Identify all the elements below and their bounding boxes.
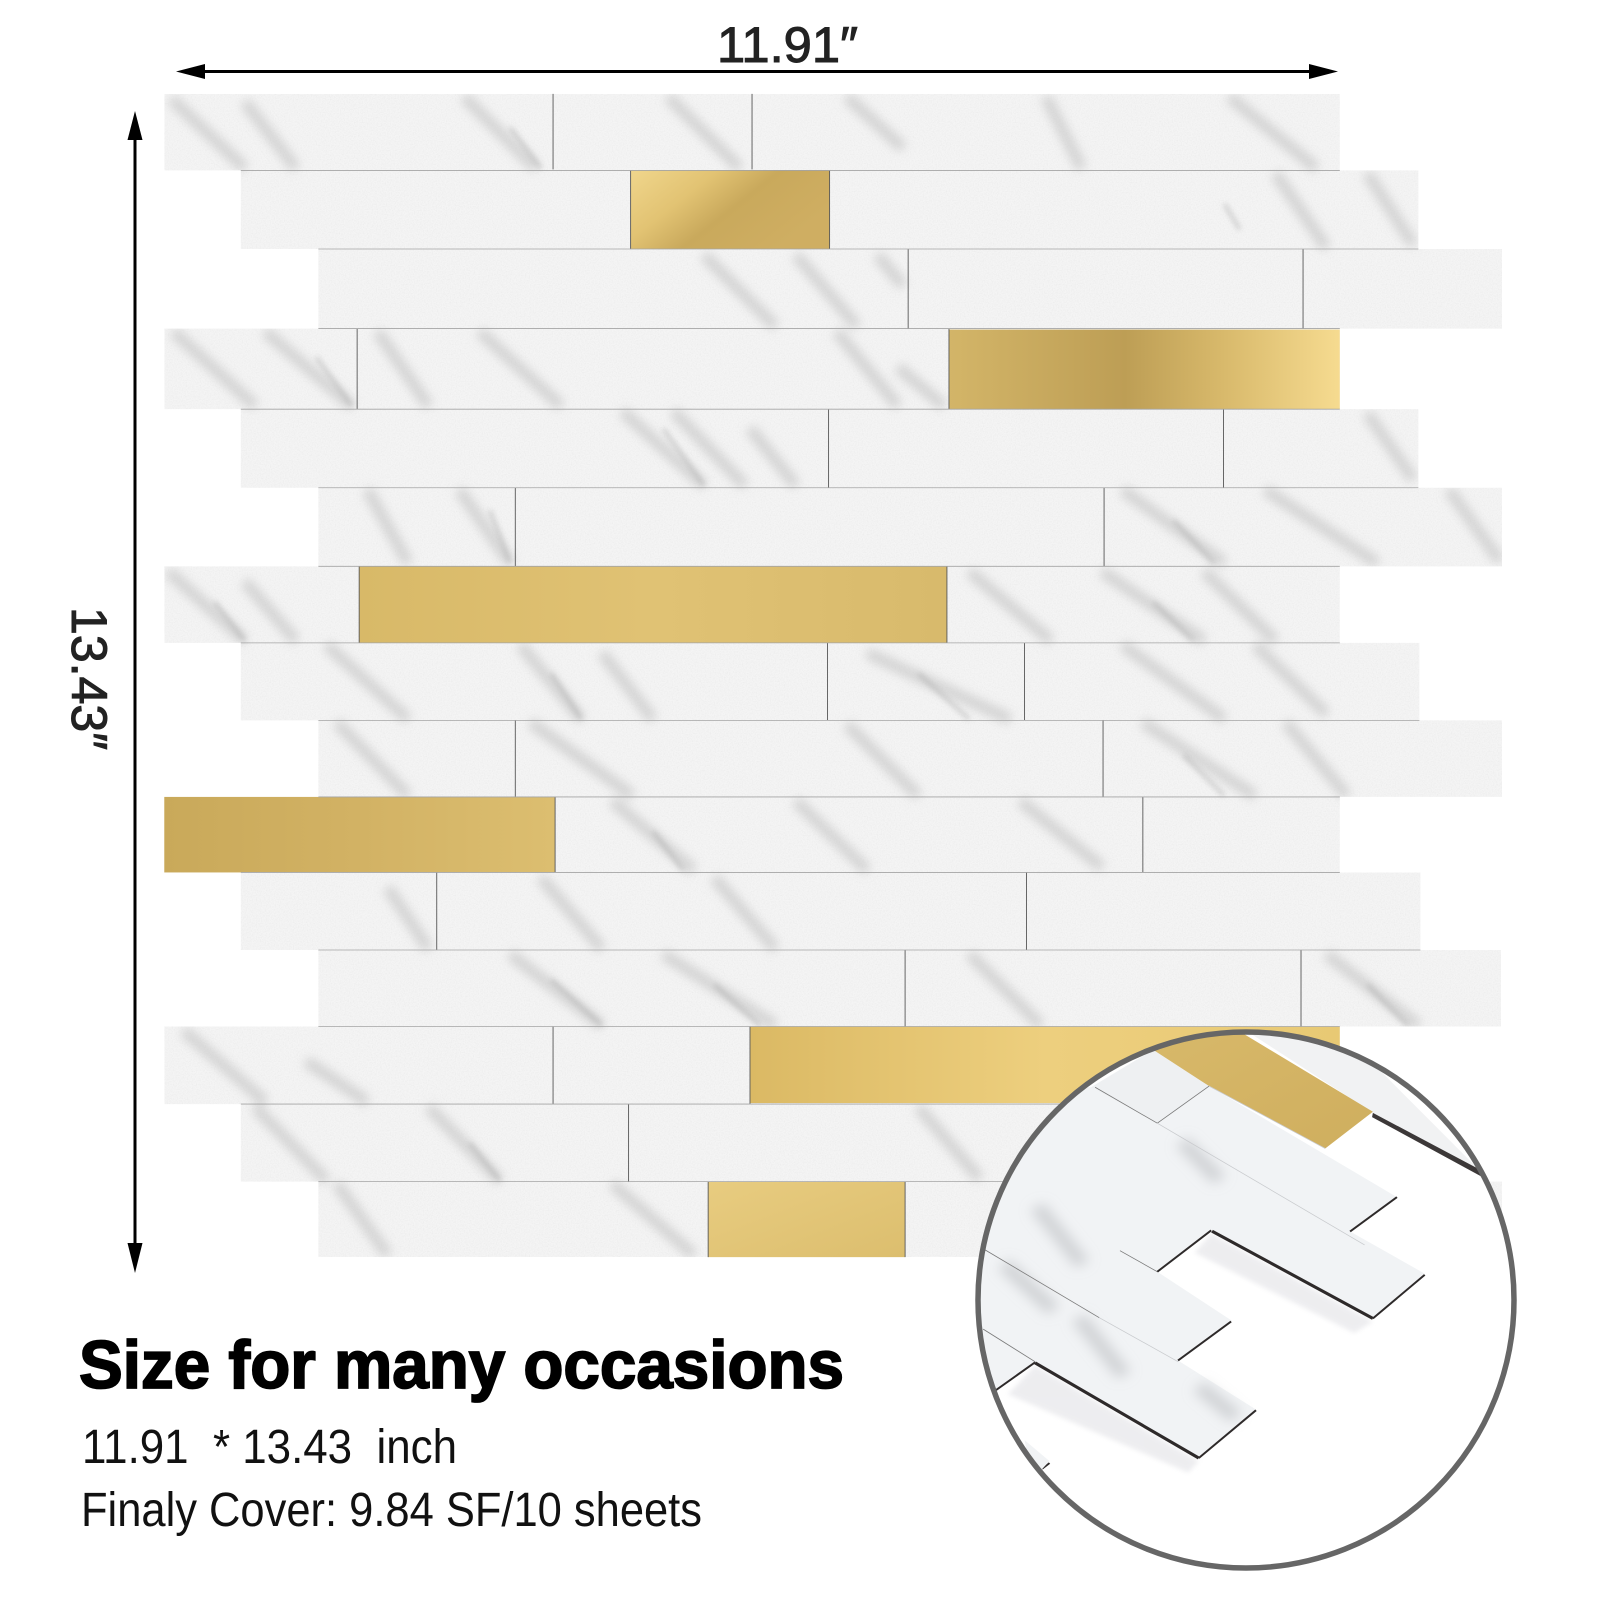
gold tile, row 7 [359,566,947,643]
gold tile, row 4 [949,330,1340,409]
size text: 11.91 * 13.43 inch [82,1421,457,1474]
top dimension arrow [176,64,1338,79]
close-up of tile edges [967,1027,1489,1473]
magnified detail circle [967,1027,1514,1568]
gold tile, row 13 [750,1027,1340,1103]
coverage text: Finaly Cover: 9.84 SF/10 sheets [81,1484,702,1537]
tile seams [241,94,1420,1257]
thin seam lines [983,1086,1209,1362]
gold tile, row 2 [631,170,830,249]
left dimension label: 13.43″ [61,607,117,750]
rear strip dark edge [1372,1113,1485,1177]
bottom-left tile fragment [1025,1440,1050,1470]
circle outline [978,1032,1514,1568]
gold strip [1149,1027,1373,1148]
top dimension label: 11.91″ [717,17,858,73]
gold tile, row 15 [708,1182,905,1257]
dark tile side edges [1035,1231,1373,1458]
rear marble strip [1254,1035,1476,1167]
marble base tiles [164,94,1502,1257]
soft drop shadows [1008,1233,1373,1473]
mosaic tile sheet [164,94,1502,1257]
small white tile [1091,1050,1209,1123]
gold tile, row 10 [164,797,555,872]
marble veins [1004,1142,1236,1417]
left dimension arrow [128,111,142,1273]
heading: Size for many occasions [79,1327,844,1403]
white comb of tiles [967,1086,1425,1457]
